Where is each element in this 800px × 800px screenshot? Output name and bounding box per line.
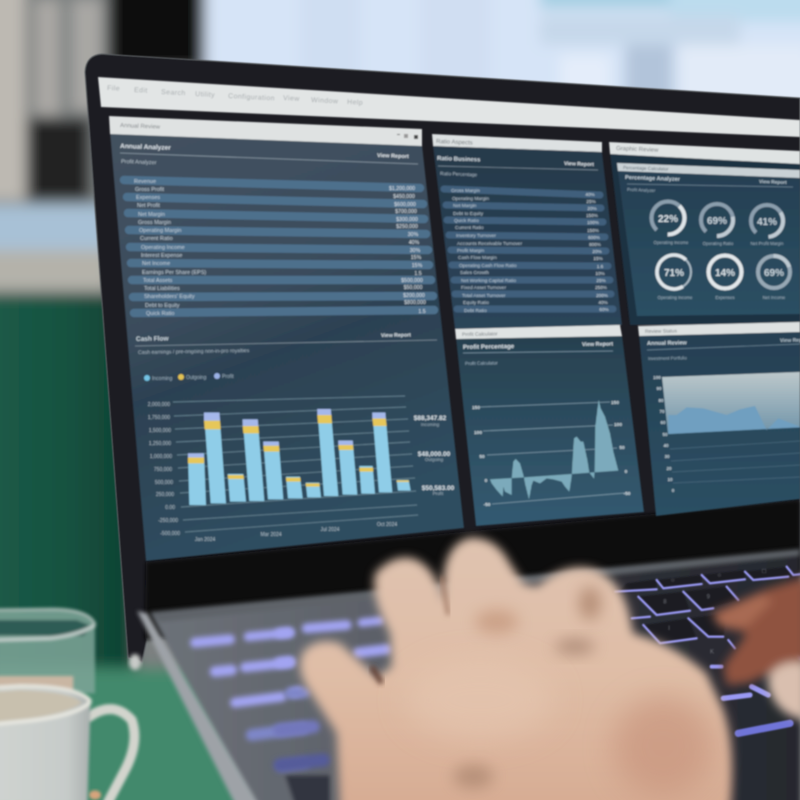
menu bar [98, 77, 800, 137]
panel: profit calculator: 50 [479, 454, 485, 460]
ratio rows [444, 188, 613, 314]
menu bar: Search [161, 89, 186, 97]
panel: profit calculator: -50 [624, 491, 631, 497]
keys on the right: 8 [663, 599, 667, 605]
ratio rows: 15% [593, 256, 603, 261]
ratio rows: 250% [595, 285, 607, 290]
panel: review status [638, 322, 800, 516]
x axis labels: Oct 2024 [377, 522, 397, 528]
area chart: 100 [653, 375, 661, 380]
annual rows: Operating Income [141, 245, 185, 251]
chart legend [144, 373, 234, 382]
gauge: 69%: Operating Ratio [703, 241, 734, 246]
area chart: 60 [660, 420, 666, 425]
gauge: 14%: 14% [715, 268, 735, 279]
ratio rows: Fixed Asset Turnover [461, 285, 506, 291]
gauge: 71%: 71% [664, 268, 684, 279]
panel: annual review: Profit Analyzer [121, 159, 157, 166]
annual rows: Current Ratio [140, 236, 173, 242]
gauge: 69%: 69% [707, 216, 727, 227]
annual rows: Quick Ratio [146, 311, 174, 317]
annual rows: Net Profit [137, 203, 160, 209]
annual rows: Net Margin [138, 212, 165, 218]
panel: profit calculator: 0 [485, 478, 488, 484]
annual rows: Total Liabilities [144, 286, 180, 292]
panel: profit calculator [455, 325, 644, 526]
gauge: 41%: Net Profit Margin [751, 241, 784, 246]
menu bar: Window [311, 97, 339, 105]
x axis labels: Jul 2024 [321, 527, 340, 533]
annual rows: Total Assets [143, 278, 173, 284]
area chart: 30 [664, 454, 670, 459]
keyboard deck [150, 549, 800, 800]
ratio rows: Cash Flow Margin [458, 255, 497, 261]
area chart: 50 [662, 432, 668, 437]
panel: annual review: View Report [377, 153, 409, 160]
gauge: 22% [645, 195, 691, 245]
gauge: 69% net income [758, 256, 790, 300]
foreground hand [300, 537, 732, 800]
percentage analyzer card: Percentage Calculator [623, 165, 669, 172]
menu bar: Help [347, 99, 363, 107]
chart totals: Outgoing [425, 457, 444, 462]
panel: profit calculator: 50 [619, 445, 625, 451]
backlit keys, left side [195, 633, 305, 767]
gauge: 41%: 41% [757, 217, 777, 228]
annual rows: $600,000 [394, 202, 416, 208]
keys on the right: 9 [707, 594, 711, 600]
gauge: 71%: Operating Income [658, 295, 693, 300]
ratio rows: 20% [587, 206, 597, 211]
panel: graphic review: Graphic Review [616, 146, 659, 154]
annual rows: Interest Expense [141, 253, 182, 259]
panel: ratio aspects: View Report [564, 161, 594, 168]
ratio rows: 40% [585, 192, 595, 197]
panel: profit calculator: 150 [611, 400, 619, 406]
x axis labels: Mar 2024 [260, 532, 282, 538]
x axis labels: Jan 2024 [195, 537, 216, 543]
ratio rows: 150% [586, 213, 598, 218]
panel: annual review: 750,000 [154, 467, 172, 473]
annual rows: $50,000 [404, 285, 422, 291]
gauge: 22%: Operating Income [654, 240, 689, 245]
laptop lid and bezel [85, 54, 800, 662]
panel: profit calculator: 100 [614, 422, 622, 428]
ratio rows: Debt to Equity [453, 211, 484, 217]
keys on the right [615, 567, 800, 733]
gauge: 41% [744, 198, 790, 246]
ratio rows: Sales Growth [460, 270, 489, 276]
annual rows: Gross Profit [135, 187, 165, 193]
panel: ratio aspects: Ratio Percentage [440, 171, 478, 178]
ratio rows: Profit Margin [457, 248, 485, 254]
panel: annual review: 0.00 [165, 505, 175, 511]
panel: annual review: 250,000 [156, 492, 174, 498]
panel: profit calculator: Profit Calculator [462, 331, 498, 338]
gauge: 14%: Expenses [715, 295, 735, 300]
panel: annual review: -500,000 [160, 531, 180, 537]
ratio rows: Total Asset Turnover [462, 293, 506, 299]
panel: annual review: 1,250,000 [149, 441, 171, 447]
ratio rows: Net Margin [453, 203, 477, 209]
panel: ratio aspects [432, 134, 622, 330]
ratio rows: 800% [589, 242, 601, 247]
panel: annual review: 500,000 [155, 480, 173, 486]
gauge: 69% net income: Net Income [763, 295, 786, 300]
panel: profit calculator: 100 [474, 430, 482, 436]
ratio rows: 150% [587, 228, 599, 233]
ratio rows: Debt Ratio [464, 308, 487, 314]
ratio rows: 40% [598, 300, 608, 305]
ratio rows: Inventory Turnover [456, 233, 496, 239]
gauge: 22%: 22% [658, 214, 678, 225]
annual rows: Shareholders' Equity [144, 294, 195, 300]
ratio rows: 10% [595, 271, 605, 276]
annual rows [124, 179, 434, 317]
panel: annual review: 1,500,000 [149, 428, 171, 434]
chart totals: Incoming [421, 422, 440, 427]
annual rows: Operating Margin [139, 228, 182, 234]
x axis labels [195, 522, 397, 543]
panel: annual review: Annual Review [120, 123, 161, 131]
keys on the right: ◻ [762, 569, 767, 575]
ratio rows: Operating Cash Flow Ratio [459, 263, 517, 269]
percentage analyzer card: View Report [759, 179, 787, 186]
right hand fingers [712, 577, 800, 720]
annual rows: Gross Margin [138, 220, 171, 226]
annual rows: 15% [411, 255, 422, 261]
ratio rows: Accounts Receivable Turnover [457, 241, 522, 247]
annual rows: 15% [412, 263, 423, 269]
panel: profit calculator: 0 [625, 469, 628, 475]
chart totals: Profit [433, 491, 444, 496]
annual rows: $450,000 [393, 194, 415, 200]
gridlines and axis labels [173, 396, 418, 532]
annual rows: Debt to Equity [145, 303, 180, 309]
panel: review status: Annual Review [647, 340, 687, 347]
ratio rows: 200% [596, 293, 608, 298]
ratio rows: 1.6 [597, 264, 604, 269]
cash flow heading: Cash earnings / pre-ongoing non-in-pro royalties [138, 348, 250, 356]
keys on the right: I [668, 626, 670, 632]
annual rows: 40% [409, 240, 420, 246]
area chart: 20 [666, 466, 672, 471]
bezel lower band [145, 500, 800, 640]
coffee cup [0, 676, 134, 800]
ratio rows: Equity Ratio [463, 300, 489, 306]
panel: annual review: Annual Analyzer [120, 143, 171, 152]
percentage analyzer card [617, 163, 800, 316]
annual rows: $1,200,000 [389, 186, 415, 192]
chart totals [414, 415, 455, 496]
chart legend: Profit [222, 374, 234, 380]
keys on the right: ☼ [717, 573, 722, 579]
area chart: 10 [667, 477, 673, 482]
area histogram [490, 400, 618, 499]
keys on the right: K [710, 649, 714, 655]
ratio rows: 100% [587, 220, 599, 225]
cash flow heading: View Report [381, 332, 411, 339]
ratio rows: 20% [592, 249, 602, 254]
gauge: 69% net income: 69% [764, 268, 784, 279]
area chart: 0 [672, 488, 675, 493]
menu bar: View [283, 95, 300, 103]
menu bar: Utility [195, 91, 215, 99]
menu bar: File [107, 85, 120, 93]
keys on the right: ☼ [670, 578, 675, 584]
annual rows: 30% [408, 232, 419, 238]
chart totals: $50,583.00 [422, 485, 455, 492]
annual rows: Net Income [142, 261, 170, 267]
panel: annual review: 1,750,000 [148, 415, 170, 421]
ratio rows: 60% [599, 307, 609, 312]
hinge foot [129, 654, 141, 670]
panel: profit calculator: Profit Calculator [465, 360, 498, 366]
annual rows: Revenue [134, 179, 156, 185]
bar chart: stacked bars [188, 409, 411, 505]
annual rows: $700,000 [395, 209, 417, 215]
panel: annual review: 2,000,000 [148, 402, 170, 408]
cash flow heading: Cash Flow [136, 335, 169, 343]
annual rows: $300,000 [396, 217, 418, 223]
area chart: 70 [659, 409, 665, 414]
deck front edge [137, 611, 262, 800]
menu bar: Edit [134, 87, 148, 95]
ratio rows: Quick Ratio [454, 218, 479, 224]
glass on table [0, 609, 95, 693]
panel: annual review: 1,000,000 [150, 454, 172, 460]
ratio rows: Net Working Capital Ratio [461, 278, 516, 284]
panel: annual review [109, 116, 464, 561]
chart totals: $48,000.00 [418, 451, 451, 458]
annual rows: 1.5 [418, 309, 426, 315]
panel: profit calculator: Profit Percentage [463, 343, 515, 351]
gauge: 71% [651, 249, 697, 300]
ratio rows: 25% [586, 199, 596, 204]
gauge: 14% [708, 256, 742, 300]
laptop screen [98, 77, 800, 561]
backlit keys behind hand [280, 621, 387, 765]
panel: ratio aspects: Ratio Business [437, 156, 481, 164]
annual rows: 1.5 [414, 271, 422, 277]
percentage analyzer card: Percentage Analyzer [625, 175, 681, 183]
percentage analyzer card: Profit Analyzer [627, 187, 656, 193]
panel: review status: Review Status [645, 328, 677, 335]
cup handle [89, 709, 134, 800]
ratio rows: 600% [588, 235, 600, 240]
panel: annual review: -250,000 [158, 518, 178, 524]
cash flow heading [135, 332, 437, 356]
chart legend: Outgoing [186, 375, 207, 381]
ratio rows: 25% [596, 278, 606, 283]
gauge: 69% [694, 197, 740, 246]
panel: graphic review [609, 142, 800, 325]
area chart: 90 [656, 386, 662, 391]
annual rows: $800,000 [404, 300, 426, 306]
chart legend: Incoming [152, 376, 173, 382]
ratio rows: Operating Margin [452, 196, 489, 202]
annual rows: $500,000 [401, 278, 423, 284]
ratio rows: Current Ratio [455, 225, 484, 231]
area chart: 40 [663, 443, 669, 448]
panel: ratio aspects: Ratio Aspects [436, 139, 473, 147]
panel: profit calculator: View Report [582, 341, 613, 348]
area chart: 80 [658, 398, 664, 403]
annual rows: 30% [410, 248, 421, 254]
annual rows: Earnings Per Share (EPS) [142, 270, 206, 276]
chart totals: $88,347.82 [414, 415, 447, 422]
panel: review status: Investment Portfolio [648, 355, 687, 361]
annual rows: $200,000 [403, 293, 425, 299]
menu bar: Configuration [228, 93, 275, 102]
ratio rows: Gross Margin [451, 188, 480, 194]
area chart [653, 372, 800, 493]
panel: profit calculator: 150 [472, 405, 480, 411]
annual rows: Expenses [136, 195, 160, 201]
annual rows: $250,000 [396, 224, 418, 230]
panel: profit calculator: -50 [484, 502, 491, 508]
